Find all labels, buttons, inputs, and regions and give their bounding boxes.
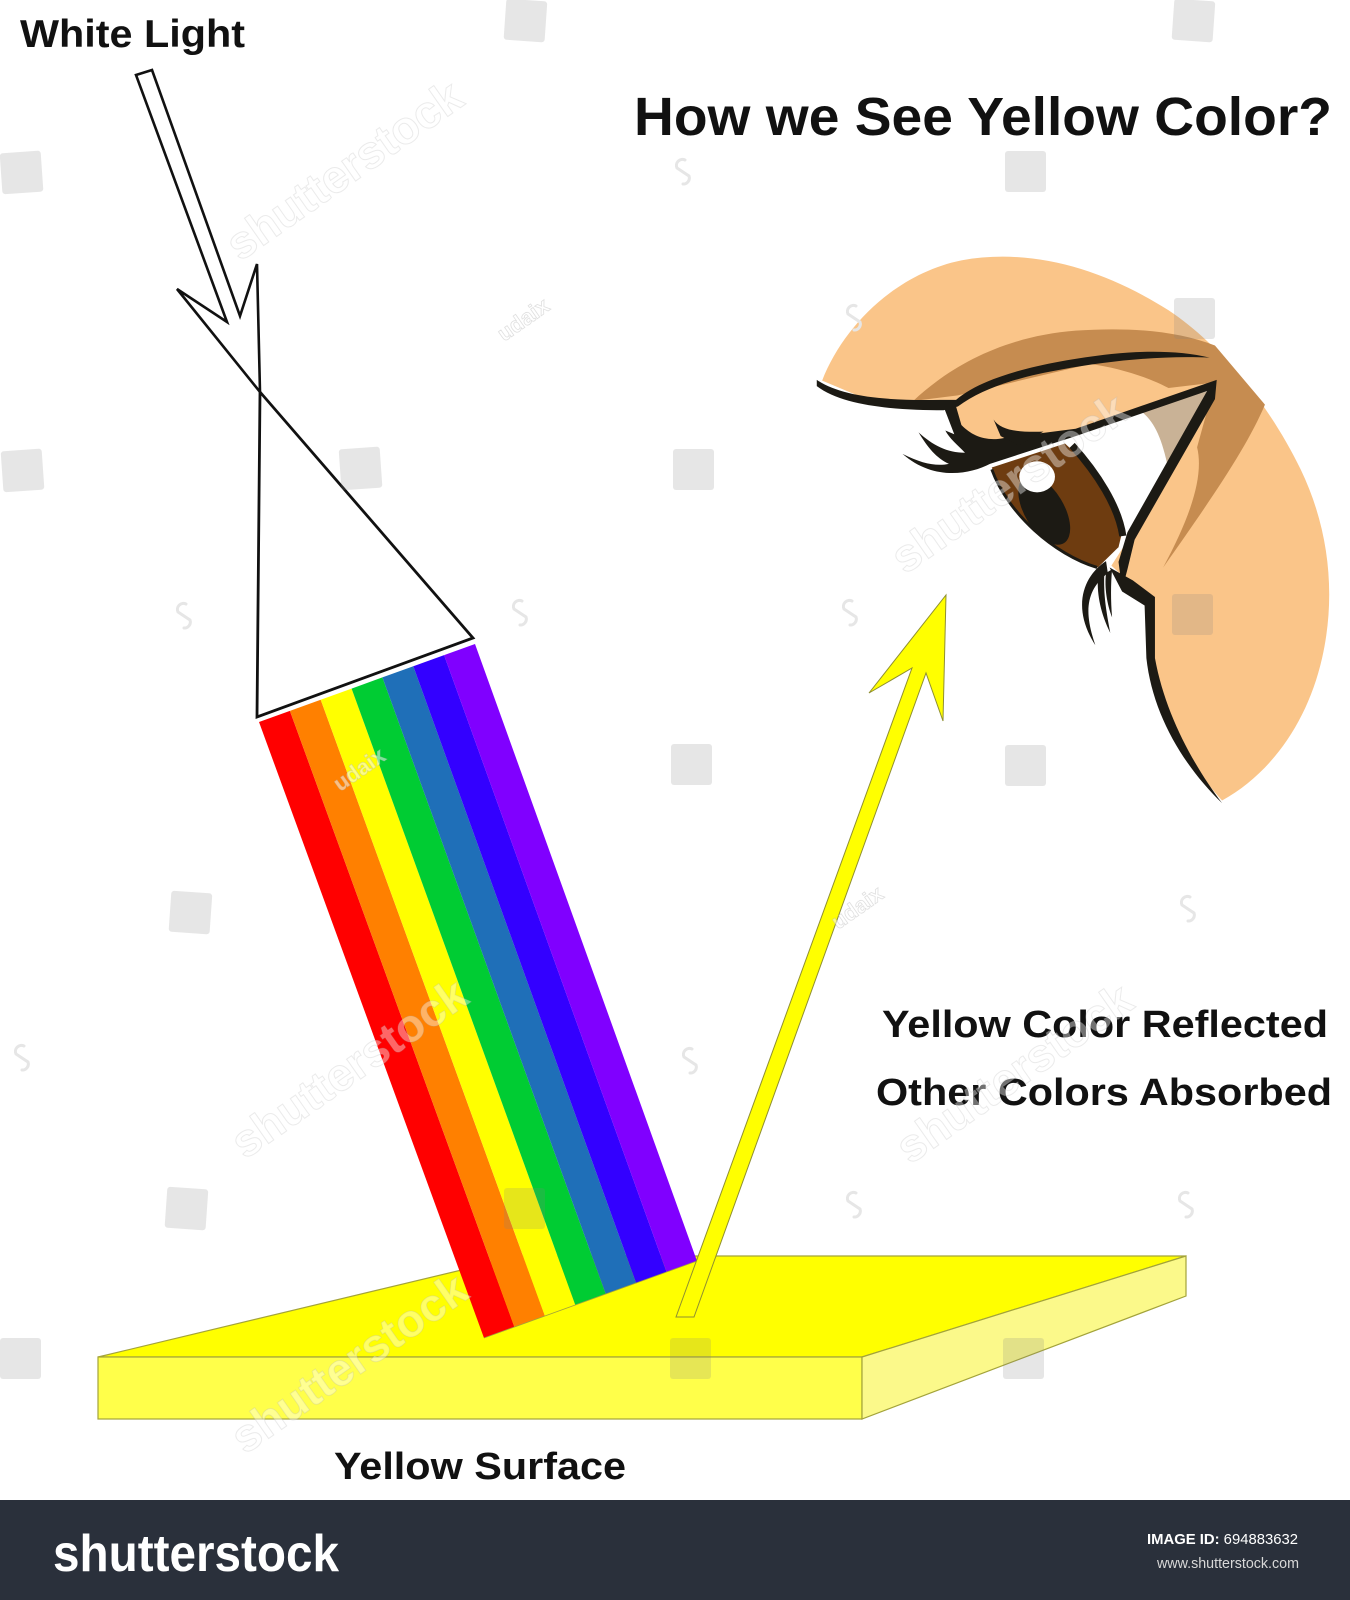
text: shutterstock (216, 69, 472, 270)
arrow: reflected yellow light (676, 595, 946, 1317)
footer logo: shutterstock (53, 1525, 339, 1583)
text: udaix (827, 880, 889, 934)
text: shutterstock (221, 967, 477, 1168)
footer bar (0, 1500, 1350, 1600)
title: How we See Yellow Color? (634, 87, 1332, 147)
arrow: white light incoming (136, 70, 260, 392)
text: shutterstock (221, 1262, 477, 1463)
text: shutterstock (881, 382, 1137, 583)
text: shutterstock (886, 972, 1142, 1173)
footer url: www.shutterstock.com (1156, 1555, 1299, 1572)
label: Yellow Color Reflected: Yellow Color Reflected (882, 1004, 1328, 1046)
icon: eye and face profile (817, 257, 1329, 803)
label: Other Colors Absorbed: Other Colors Absorbed (876, 1072, 1332, 1114)
prism: white triangle (257, 392, 473, 717)
surface: yellow slab (98, 1256, 1186, 1419)
footer image id: IMAGE ID: 694883632 (1147, 1531, 1298, 1548)
text: udaix (329, 742, 391, 796)
text: udaix (493, 292, 555, 346)
spectrum: seven colour bands (259, 644, 697, 1338)
heading: White Light: White Light (20, 13, 245, 56)
label: Yellow Surface: Yellow Surface (334, 1446, 626, 1488)
